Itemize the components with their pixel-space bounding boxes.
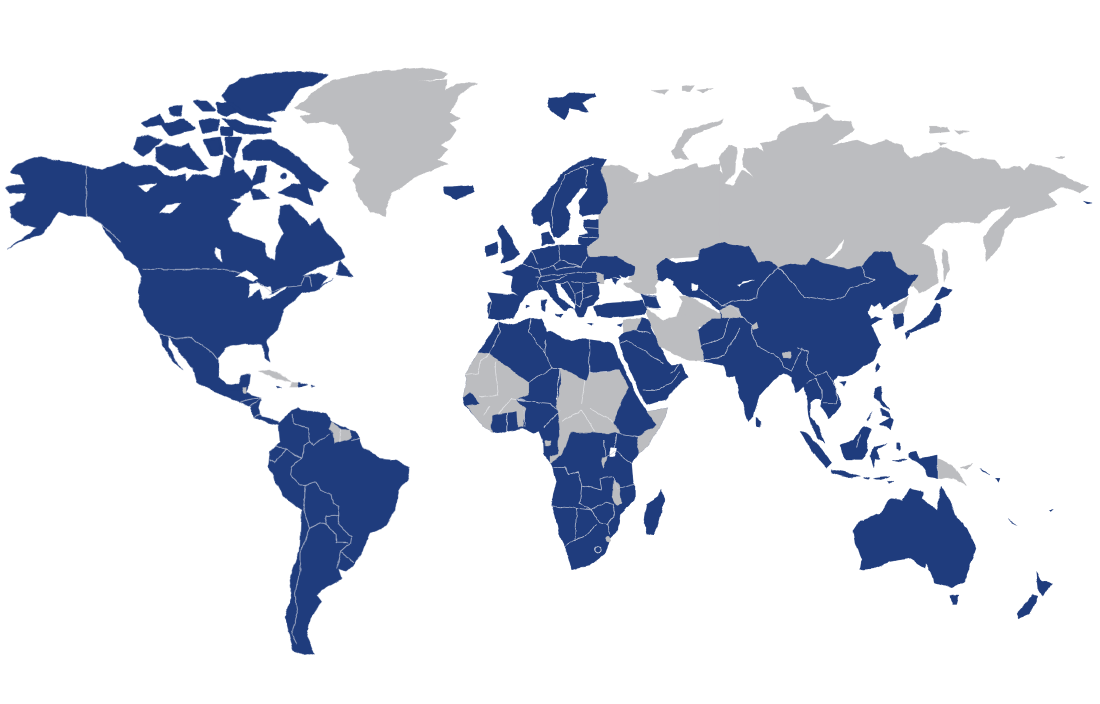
Central and South America: [220, 387, 409, 655]
South, East and Central Asia: [657, 242, 1000, 485]
Iran (grey): [647, 308, 712, 362]
Greenland, Iceland and Svalbard: [295, 67, 597, 217]
Caspian Sea, Black Sea and Sea of Azov: [598, 276, 682, 320]
Syria (grey): [623, 318, 642, 335]
North America: [6, 71, 353, 401]
Russia and northern Asia (grey): [595, 85, 1092, 293]
western Russia, Belarus and Turkmenistan (grey): [587, 163, 723, 327]
Arabia, Iraq and the Levant: [618, 318, 688, 405]
Australia and New Zealand: [853, 487, 1053, 618]
Africa: [463, 318, 668, 569]
Europe: [485, 157, 662, 327]
